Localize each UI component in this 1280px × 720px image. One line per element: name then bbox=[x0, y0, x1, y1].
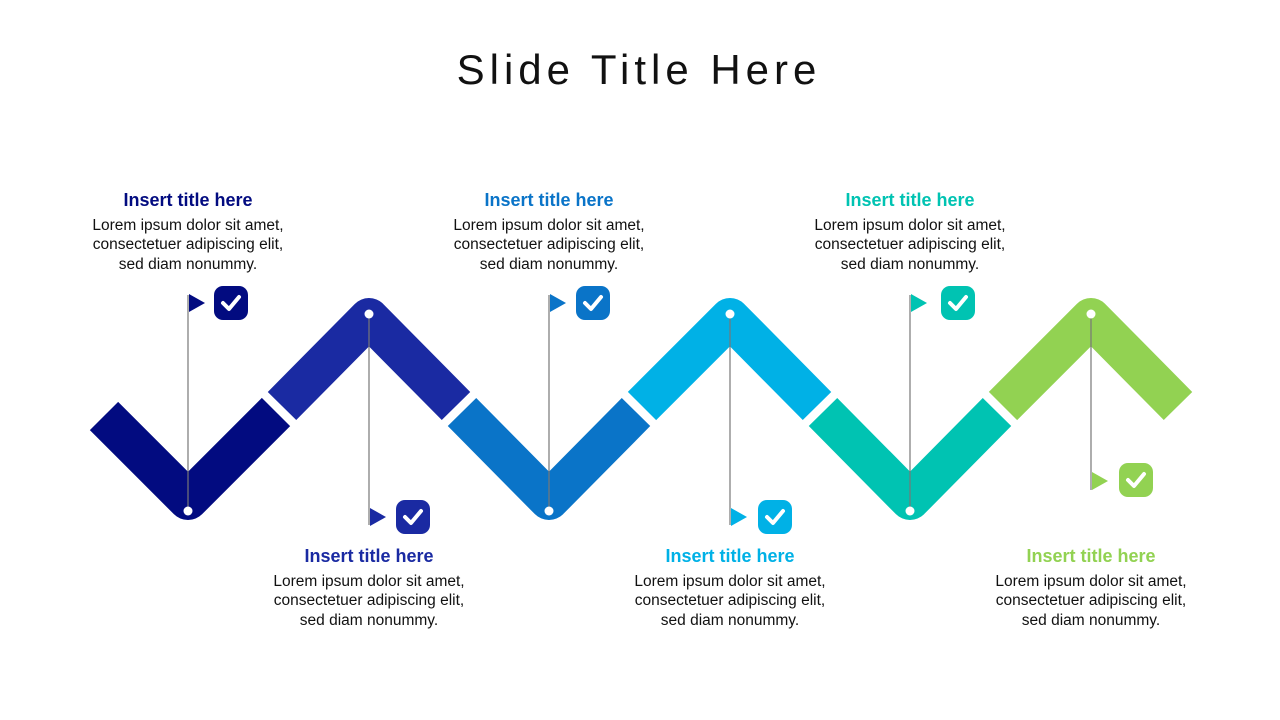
text 4: Insert title here bbox=[665, 546, 795, 566]
text 3 bbox=[453, 190, 645, 273]
segment 4 bbox=[642, 318, 817, 406]
text 5: sed diam nonummy. bbox=[841, 256, 979, 273]
segment 5 bbox=[823, 412, 997, 500]
text 3: Insert title here bbox=[484, 190, 614, 210]
text 2 bbox=[273, 546, 465, 629]
text 3: sed diam nonummy. bbox=[480, 256, 618, 273]
text 3: Lorem ipsum dolor sit amet, bbox=[453, 217, 645, 234]
text 5 bbox=[814, 190, 1006, 273]
text 4 bbox=[634, 546, 826, 629]
text 5: Lorem ipsum dolor sit amet, bbox=[814, 217, 1006, 234]
text 1: sed diam nonummy. bbox=[119, 256, 257, 273]
text 5: Insert title here bbox=[845, 190, 975, 210]
text 6: consectetuer adipiscing elit, bbox=[996, 592, 1186, 609]
text 6: sed diam nonummy. bbox=[1022, 612, 1160, 629]
text 1 bbox=[92, 190, 284, 273]
segment 1 bbox=[104, 412, 276, 500]
text 2: Lorem ipsum dolor sit amet, bbox=[273, 573, 465, 590]
text 2: sed diam nonummy. bbox=[300, 612, 438, 629]
text 4: consectetuer adipiscing elit, bbox=[635, 592, 825, 609]
text 6: Insert title here bbox=[1026, 546, 1156, 566]
text 4: Lorem ipsum dolor sit amet, bbox=[634, 573, 826, 590]
segment 3 bbox=[462, 412, 636, 500]
text 1: Insert title here bbox=[123, 190, 253, 210]
text 5: consectetuer adipiscing elit, bbox=[815, 236, 1005, 253]
text 6: Lorem ipsum dolor sit amet, bbox=[995, 573, 1187, 590]
segment 6 bbox=[1003, 318, 1178, 406]
segment 2 bbox=[282, 318, 456, 406]
flags bbox=[189, 294, 1108, 526]
text 1: consectetuer adipiscing elit, bbox=[93, 236, 283, 253]
text 1: Lorem ipsum dolor sit amet, bbox=[92, 217, 284, 234]
text 2: Insert title here bbox=[304, 546, 434, 566]
text 4: sed diam nonummy. bbox=[661, 612, 799, 629]
text 3: consectetuer adipiscing elit, bbox=[454, 236, 644, 253]
title: Slide Title Here bbox=[457, 46, 821, 93]
text 6 bbox=[995, 546, 1187, 629]
check icons bbox=[214, 286, 1153, 534]
text 2: consectetuer adipiscing elit, bbox=[274, 592, 464, 609]
